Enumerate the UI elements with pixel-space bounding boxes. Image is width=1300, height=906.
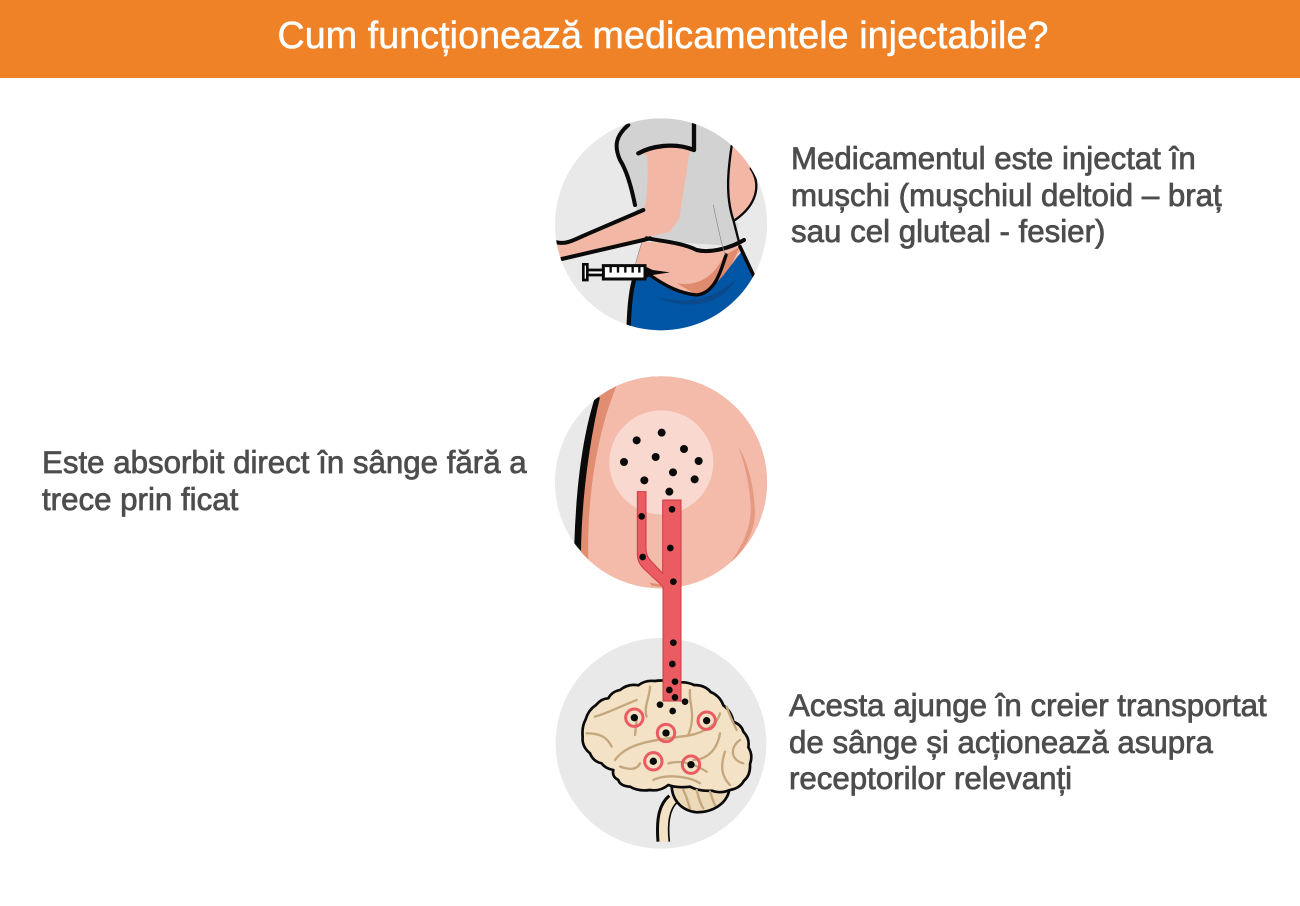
text: step 2 absorption: trece prin ficat — [42, 482, 238, 516]
title banner: Cum funcționează medicamentele injectabile? — [278, 14, 1048, 56]
icon: brain circle — [556, 638, 766, 849]
illustrations — [555, 118, 767, 848]
text: step 1 injection: mușchi (mușchiul deltoid – braț — [791, 178, 1222, 212]
icon: blood vessel with branch — [637, 492, 681, 701]
text: step 1 injection: sau cel gluteal - fesier) — [791, 214, 1105, 249]
text: step 2 absorption — [42, 445, 527, 517]
text: step 1 injection — [791, 141, 1222, 249]
text: step 2 absorption: Este absorbit direct în sânge fără a — [42, 445, 527, 480]
title banner — [0, 0, 1300, 78]
cerebellum — [672, 785, 729, 812]
text: step 3 brain: receptorilor relevanți — [789, 761, 1072, 796]
icon: muscle tissue circle — [555, 376, 767, 588]
icon: brain receptors — [626, 639, 715, 773]
brain — [582, 681, 751, 792]
icon: syringe — [583, 264, 670, 280]
text: step 1 injection: Medicamentul este injectat în — [791, 141, 1196, 176]
text: step 3 brain: de sânge și acționează asupra — [789, 724, 1213, 760]
text: step 3 brain — [788, 688, 1267, 796]
drug particles — [620, 429, 703, 585]
icon: injection in the hip circle — [553, 118, 773, 338]
text: step 3 brain: Acesta ajunge în creier transportat — [789, 688, 1267, 723]
brain stem — [658, 795, 677, 842]
